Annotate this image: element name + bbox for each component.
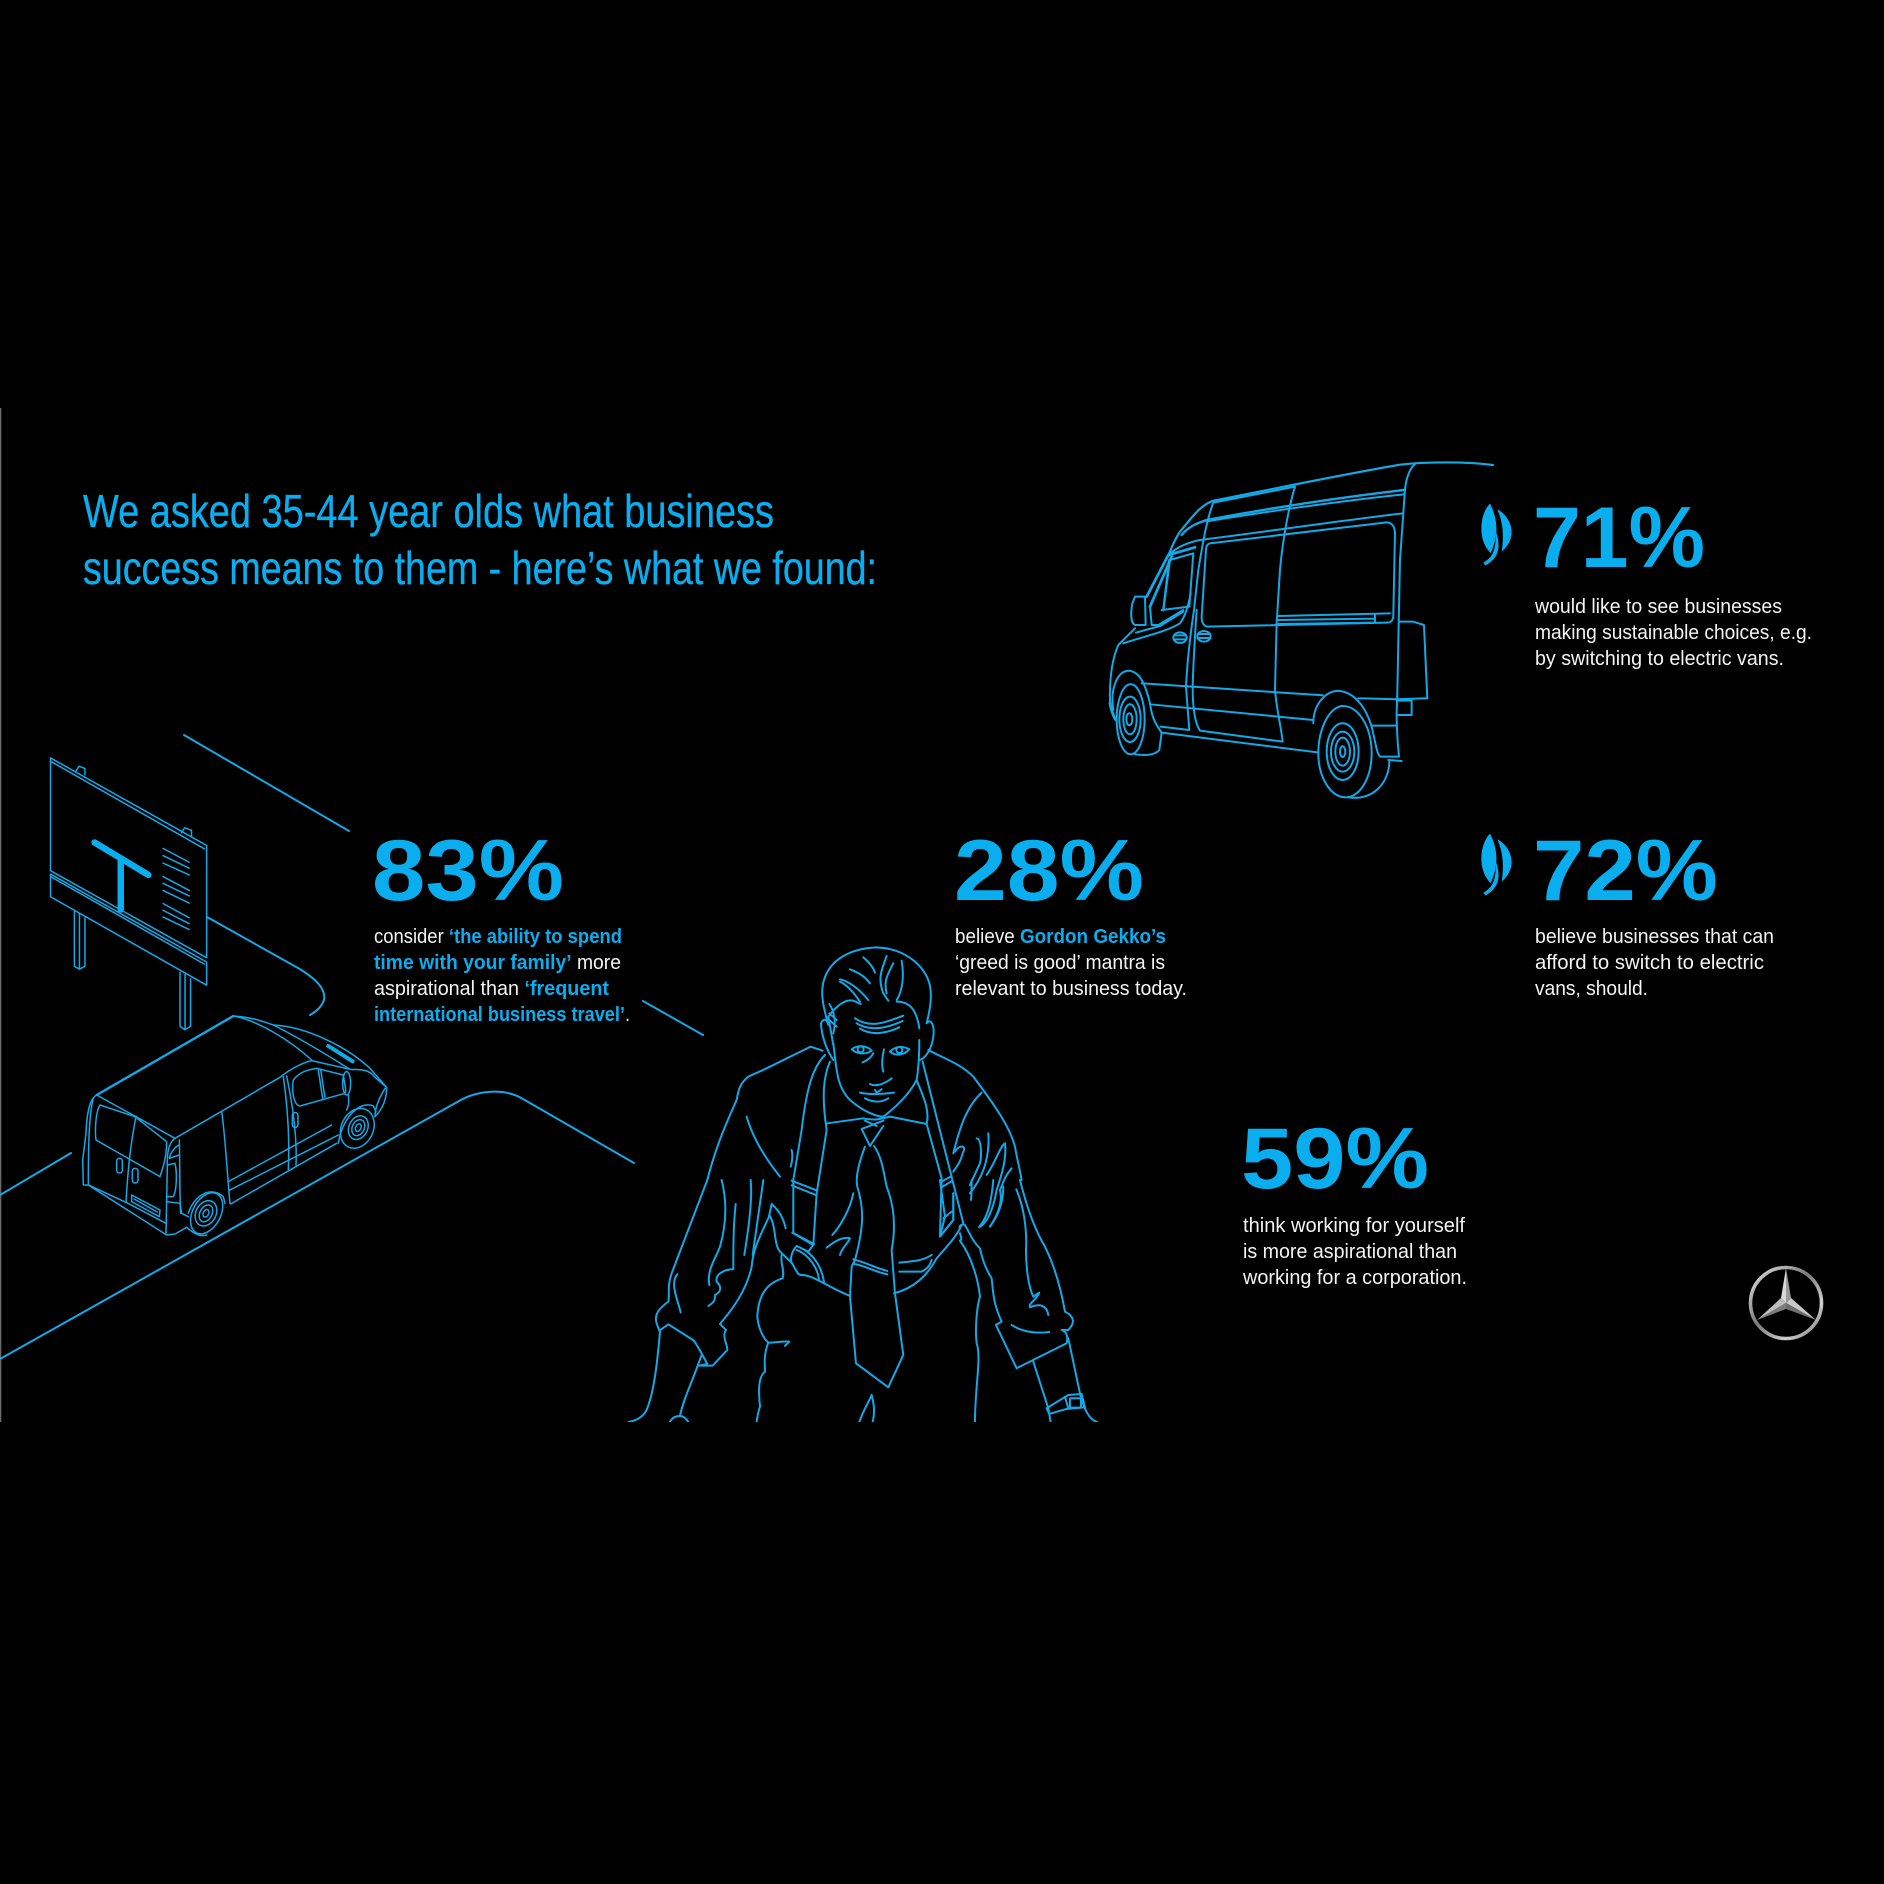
text: 83% description: time with your family’ more xyxy=(374,951,621,974)
text: 28% description: believe Gordon Gekko’s xyxy=(955,925,1166,948)
text: 71% description: making sustainable choices, e.g. xyxy=(1535,621,1812,644)
text: 59% description: think working for yourself xyxy=(1243,1214,1465,1237)
stat: 71% xyxy=(1533,490,1812,670)
text: 72% description: afford to switch to electric xyxy=(1535,951,1764,974)
stat: 71%: 71% xyxy=(1533,490,1705,586)
text: 71% description xyxy=(1534,595,1812,670)
text: 59% description: is more aspirational than xyxy=(1243,1240,1457,1263)
stat: 28% xyxy=(954,823,1187,1000)
road lines xyxy=(0,735,703,1359)
text: 72% description xyxy=(1535,925,1774,1000)
stat: 83%: 83% xyxy=(372,823,564,919)
illustration: isometric van xyxy=(83,1016,387,1239)
stat: 28%: 28% xyxy=(954,823,1144,919)
icon: leaf 72% xyxy=(1481,833,1512,896)
icon: leaf 71% xyxy=(1481,503,1512,566)
text: 83% description: international business travel’. xyxy=(374,1003,630,1026)
text: 28% description xyxy=(955,925,1187,1000)
logo: three-pointed star xyxy=(1750,1268,1822,1338)
text: 83% description xyxy=(374,925,630,1026)
title: success means to them - here’s what we found: xyxy=(83,542,877,594)
text: 71% description: by switching to electric vans. xyxy=(1535,647,1784,670)
text: 59% description: working for a corporation. xyxy=(1242,1266,1467,1289)
title xyxy=(83,485,877,594)
stat: 83% xyxy=(372,823,630,1026)
text: 28% description: relevant to business today. xyxy=(955,977,1187,1000)
title: We asked 35-44 year olds what business xyxy=(83,485,774,537)
text: 59% description xyxy=(1242,1214,1467,1289)
illustration: billboard xyxy=(51,758,207,1030)
text: 83% description: consider ‘the ability to spend xyxy=(374,925,622,948)
stat: 72%: 72% xyxy=(1533,823,1718,919)
text: 83% description: aspirational than ‘frequent xyxy=(374,977,609,1000)
illustration: businessman xyxy=(628,947,1097,1422)
text: 72% description: vans, should. xyxy=(1535,977,1648,1000)
stat: 72% xyxy=(1533,823,1774,1000)
icon: billboard T logo xyxy=(95,842,148,909)
stat: 59% xyxy=(1241,1111,1467,1289)
text: 71% description: would like to see businesses xyxy=(1534,595,1782,618)
stat: 59%: 59% xyxy=(1241,1111,1429,1207)
text: 28% description: ‘greed is good’ mantra is xyxy=(955,951,1165,974)
text: 72% description: believe businesses that can xyxy=(1535,925,1774,948)
illustration: side view van xyxy=(1110,462,1493,798)
